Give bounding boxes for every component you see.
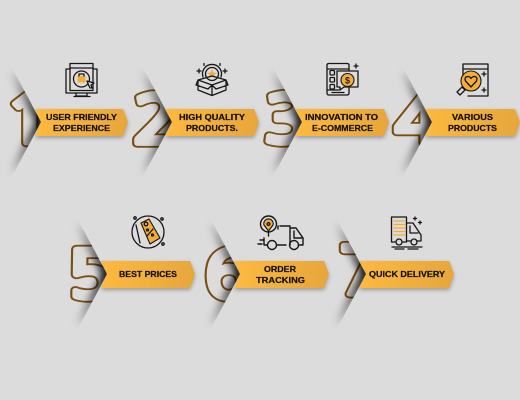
banner 6: TRACKING	[256, 275, 305, 285]
number 2: 2	[132, 88, 180, 154]
number 7	[338, 241, 366, 298]
banner 5: BEST PRICES	[119, 269, 177, 279]
banner 4: VARIOUS	[452, 112, 493, 122]
number 3: 3	[263, 88, 311, 154]
number 6: 6	[204, 242, 252, 308]
number 6: 6	[204, 242, 252, 308]
chevron shadow 2	[144, 70, 172, 175]
banner 4: PRODUCTS	[448, 123, 497, 133]
number 7: 7	[338, 238, 386, 304]
icon: truck with pin	[258, 216, 303, 250]
chevron shadow 6	[212, 222, 240, 327]
number 1	[10, 90, 38, 148]
number 2: 2	[132, 88, 180, 154]
dollar sign: $	[345, 76, 350, 86]
banner 4	[425, 109, 520, 138]
chevron shadow 4	[404, 70, 432, 175]
icon: box with star	[196, 64, 228, 96]
chevron shadow 3	[274, 70, 302, 175]
step 3	[263, 64, 389, 175]
banner 2: HIGH QUALITY	[179, 112, 245, 122]
chevron shadow 7	[338, 222, 366, 327]
number 7: 7	[338, 238, 386, 304]
step 7	[338, 217, 454, 327]
step 6	[204, 216, 329, 327]
banner 6	[234, 261, 329, 290]
banner 1	[35, 109, 128, 138]
number 1: 1	[4, 88, 52, 154]
step 1	[4, 64, 128, 175]
chevron shadow 5	[79, 222, 107, 327]
chevron shadow 1	[13, 70, 41, 175]
icon: price tag	[132, 216, 164, 248]
number 1: 1	[4, 88, 52, 154]
banner 1: USER FRIENDLY	[46, 112, 117, 122]
banner 3: INNOVATION TO	[305, 112, 379, 122]
banner 7: QUICK DELIVERY	[369, 269, 445, 279]
banner 3	[295, 109, 389, 138]
number 3: 3	[263, 88, 311, 154]
banner 1: EXPERIENCE	[53, 123, 110, 133]
step 5	[67, 216, 195, 327]
number 5: 5	[67, 242, 115, 308]
number 4: 4	[394, 88, 442, 154]
icon: magnifier with heart	[457, 64, 488, 96]
number 4: 4	[394, 88, 442, 154]
number 5: 5	[67, 242, 115, 308]
banner 3: E-COMMERCE	[312, 123, 373, 133]
banner 2	[165, 109, 259, 138]
step 2	[132, 64, 259, 175]
banner 2: PRODUCTS.	[186, 123, 238, 133]
banner 6: ORDER	[264, 264, 296, 274]
icon: phone with dollar	[327, 64, 358, 95]
step 4	[394, 64, 520, 175]
icon: monitor with shopping bag	[66, 64, 97, 96]
icon: delivery truck	[392, 217, 422, 249]
